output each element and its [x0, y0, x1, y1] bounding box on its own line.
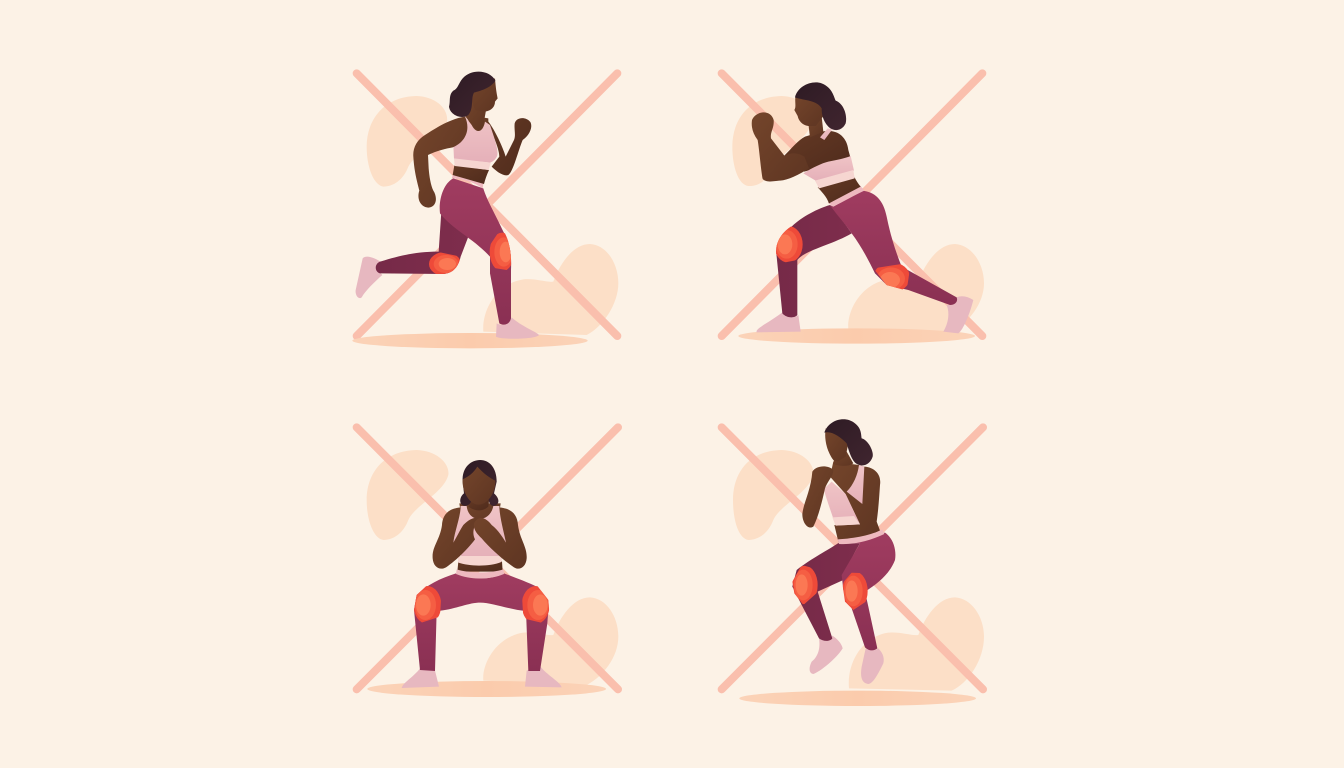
- top straps: [820, 128, 832, 140]
- sports top: [803, 156, 854, 181]
- rear foot: [943, 296, 973, 333]
- neck: [468, 498, 489, 510]
- sports top: [453, 115, 497, 163]
- top band: [454, 158, 491, 170]
- top band: [457, 556, 503, 566]
- sports top: [453, 506, 507, 557]
- ground shadow: [738, 328, 975, 344]
- figure: squat: [402, 460, 562, 688]
- top band: [815, 170, 855, 188]
- leggings: [414, 573, 548, 671]
- waistband: [828, 185, 864, 207]
- right knee glow: [522, 586, 550, 624]
- sports top strap: [847, 465, 864, 504]
- front foot: [496, 317, 539, 339]
- left knee glow: [792, 566, 818, 604]
- front leg: [440, 178, 511, 325]
- panel: squat pose, avoid: [357, 427, 618, 697]
- back foot: [356, 257, 382, 298]
- background blob upper left: [367, 450, 448, 540]
- front foot: [757, 312, 801, 332]
- waistband: [452, 174, 484, 188]
- figure: jump: [792, 419, 895, 684]
- face: [794, 95, 823, 126]
- front knee glow: [774, 226, 803, 263]
- background blob lower right: [849, 597, 984, 691]
- left foot: [402, 666, 439, 688]
- rear knee glow: [875, 264, 910, 290]
- ground shadow: [367, 681, 606, 697]
- background blob lower right: [483, 244, 618, 335]
- extended rear leg: [830, 191, 957, 305]
- hair: [460, 460, 498, 506]
- left knee glow: [413, 586, 441, 624]
- figure: lunge: [752, 82, 973, 333]
- background blob lower right: [848, 244, 984, 332]
- neck: [833, 452, 853, 466]
- cross mark: [357, 427, 618, 689]
- cross mark: [357, 73, 617, 336]
- cross mark: [722, 427, 983, 689]
- cross mark: [722, 73, 982, 336]
- face: [468, 78, 498, 112]
- neck: [808, 117, 823, 137]
- background blob upper left: [733, 450, 813, 540]
- hair: [824, 419, 873, 465]
- right foot: [861, 648, 884, 684]
- back leg: [376, 207, 468, 274]
- background blob lower right: [483, 597, 618, 685]
- figure: runner: [356, 72, 539, 339]
- right foot: [525, 666, 562, 687]
- ground shadow: [352, 333, 588, 348]
- chest: [468, 115, 488, 140]
- front knee glow: [490, 232, 512, 270]
- panel: lunge pose, avoid: [722, 73, 984, 344]
- right knee glow: [842, 572, 868, 610]
- midriff: [453, 165, 489, 184]
- waistband: [456, 569, 504, 578]
- midriff: [457, 561, 503, 572]
- chest: [459, 503, 501, 525]
- hair: [449, 72, 495, 117]
- left foot: [810, 636, 843, 674]
- top band: [832, 516, 860, 526]
- front arm and clasped hands: [802, 466, 833, 528]
- face: [825, 428, 848, 462]
- background blob upper left: [732, 96, 812, 186]
- back knee glow: [429, 252, 460, 274]
- right leg: [838, 533, 895, 650]
- neck: [465, 98, 487, 130]
- near arm: [413, 117, 467, 208]
- sports top lower: [824, 482, 860, 526]
- waistband: [838, 529, 884, 544]
- near arm: [752, 112, 809, 181]
- panel: jump pose, avoid: [722, 419, 984, 706]
- far arm: [487, 118, 531, 175]
- hair: [795, 82, 846, 130]
- upper body: [783, 131, 851, 172]
- face: [463, 467, 495, 505]
- midriff: [818, 177, 861, 203]
- left leg: [792, 543, 860, 641]
- background blob upper left: [367, 96, 447, 187]
- right arm: [474, 507, 527, 569]
- left arm: [433, 507, 482, 569]
- upper body and arm: [830, 462, 880, 542]
- ground shadow: [739, 691, 976, 706]
- bent front leg: [776, 205, 852, 317]
- panel: running pose, avoid: [352, 72, 618, 348]
